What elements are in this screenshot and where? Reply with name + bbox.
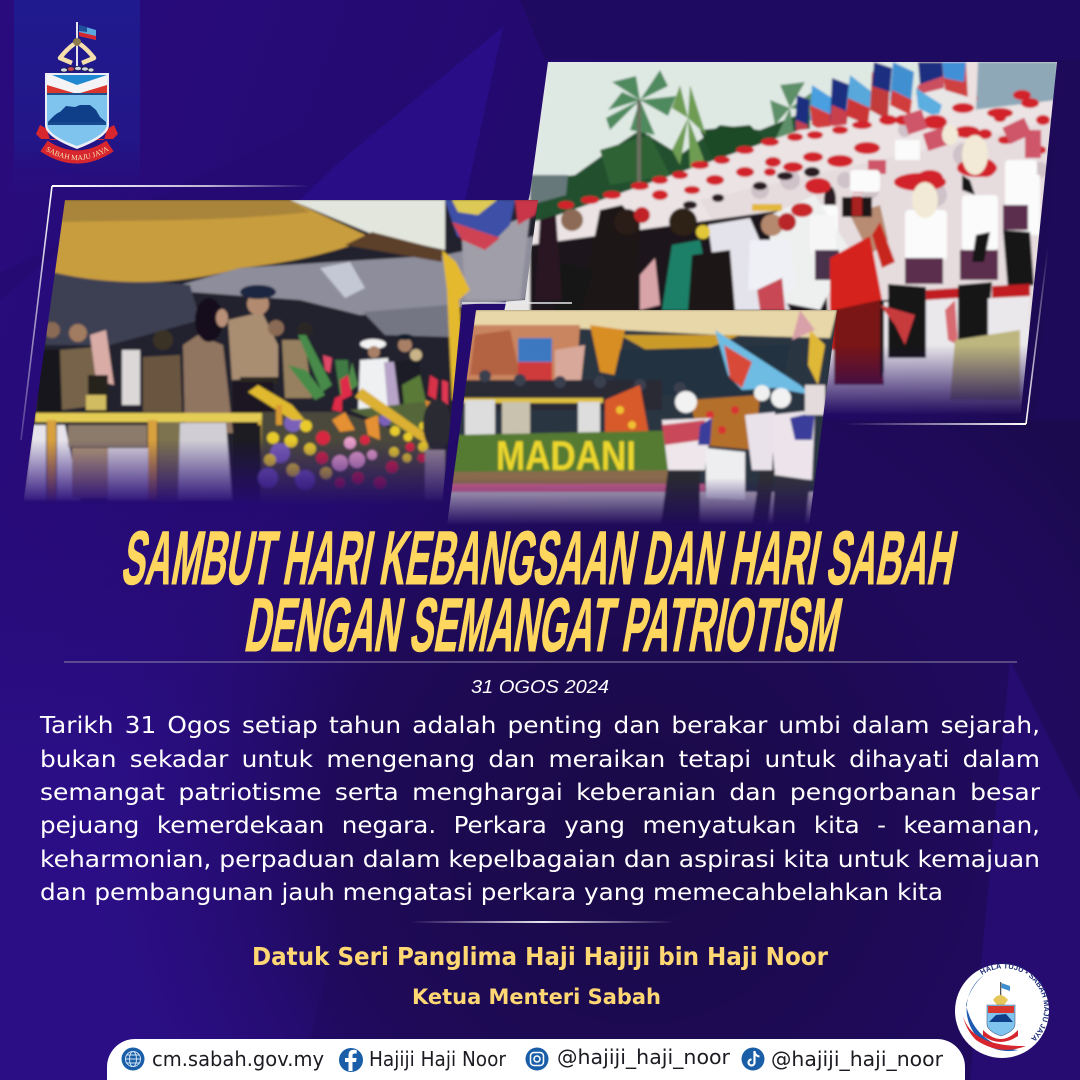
photo: dignitaries on the grandstand	[24, 200, 538, 500]
statement text	[39, 713, 1041, 906]
photo: Madani parade ground: MADANI	[496, 432, 636, 479]
statement text: bukan sekadar untuk mengenang dan meraikan tetapi untuk dihayati dalam	[40, 747, 1040, 773]
facebook name: Hajiji Haji Noor	[369, 1047, 507, 1071]
photo frame lines	[21, 185, 1048, 440]
tiktok handle: @hajiji_haji_noor	[771, 1047, 944, 1071]
photo: Madani parade ground	[440, 305, 840, 532]
icon: facebook	[339, 1048, 363, 1072]
icon: tiktok	[742, 1048, 764, 1070]
speaker role: Ketua Menteri Sabah	[412, 985, 661, 1009]
website: cm.sabah.gov.my	[152, 1047, 324, 1071]
badge: Hala Tuju Sabah Maju Jaya	[955, 963, 1050, 1058]
speaker name: Datuk Seri Panglima Haji Hajiji bin Haji Noor	[252, 942, 829, 971]
photo: crowd waving flags	[504, 62, 1057, 412]
logo motto: SABAH MAJU JAYA	[46, 147, 109, 160]
logo: Sabah coat of arms	[36, 22, 118, 164]
badge: Hala Tuju Sabah Maju Jaya: HALA TUJU • SABAH MAJU JAYA	[980, 963, 1050, 1041]
statement text: dan pembangunan jauh mengatasi perkara yang memecahbelahkan kita	[40, 880, 943, 906]
date: 31 OGOS 2024	[471, 677, 609, 697]
statement text: Tarikh 31 Ogos setiap tahun adalah penting dan berakar umbi dalam sejarah,	[39, 713, 1040, 739]
icon: website globe	[122, 1048, 144, 1070]
statement text: keharmonian, perpaduan dalam kepelbagaian dan aspirasi kita untuk kemajuan	[40, 847, 1040, 873]
statement text: pejuang kemerdekaan negara. Perkara yang menyatukan kita - keamanan,	[40, 813, 1040, 839]
instagram handle: @hajiji_haji_noor	[557, 1045, 731, 1069]
social bar	[107, 1039, 965, 1080]
title	[117, 517, 963, 668]
statement text: semangat patriotisme serta menghargai keberanian dan pengorbanan besar	[40, 780, 1041, 806]
icon: instagram	[526, 1048, 548, 1070]
